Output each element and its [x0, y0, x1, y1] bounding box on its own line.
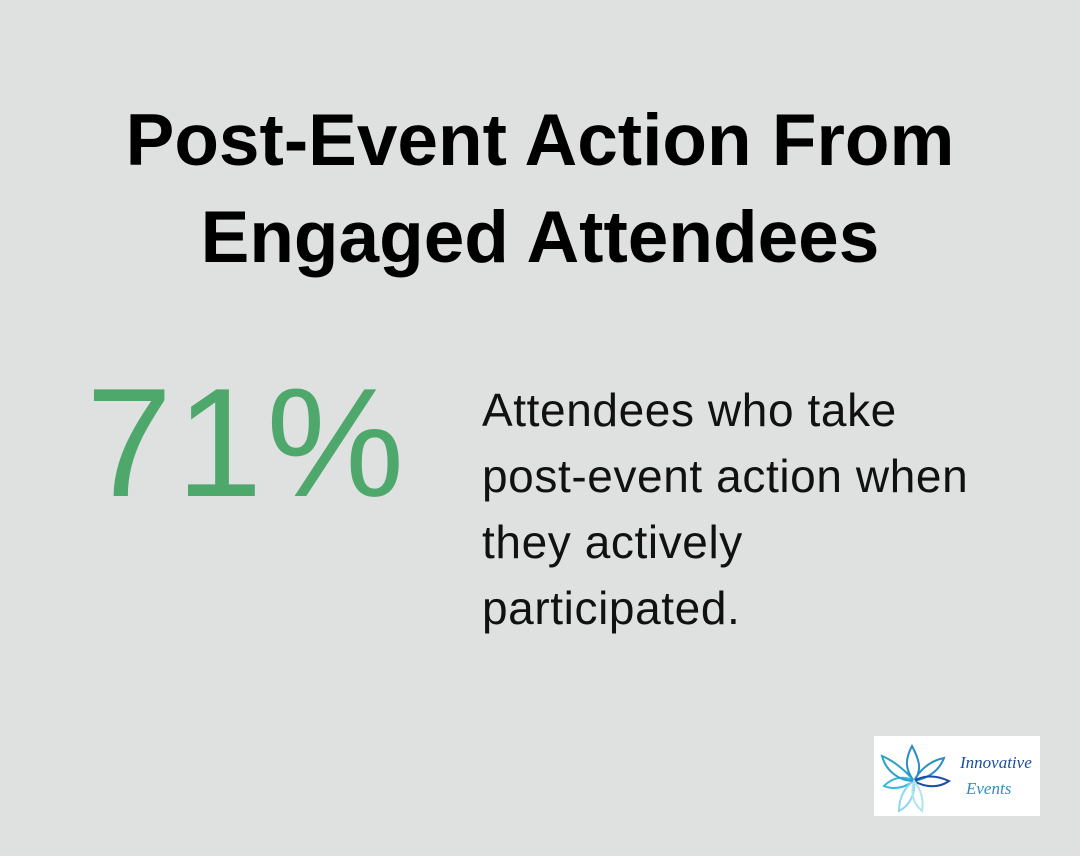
- logo: Events: [965, 779, 1012, 798]
- logo: [874, 736, 1040, 816]
- description: post-event action when: [482, 450, 968, 502]
- description: [482, 384, 968, 634]
- description: participated.: [482, 582, 740, 634]
- description: Attendees who take: [482, 384, 897, 436]
- title: Post-Event Action From: [126, 100, 954, 181]
- logo: Innovative: [959, 753, 1032, 772]
- big stat: 71%: [86, 356, 408, 529]
- description: they actively: [482, 516, 743, 568]
- title: [126, 100, 954, 278]
- title: Engaged Attendees: [201, 197, 879, 278]
